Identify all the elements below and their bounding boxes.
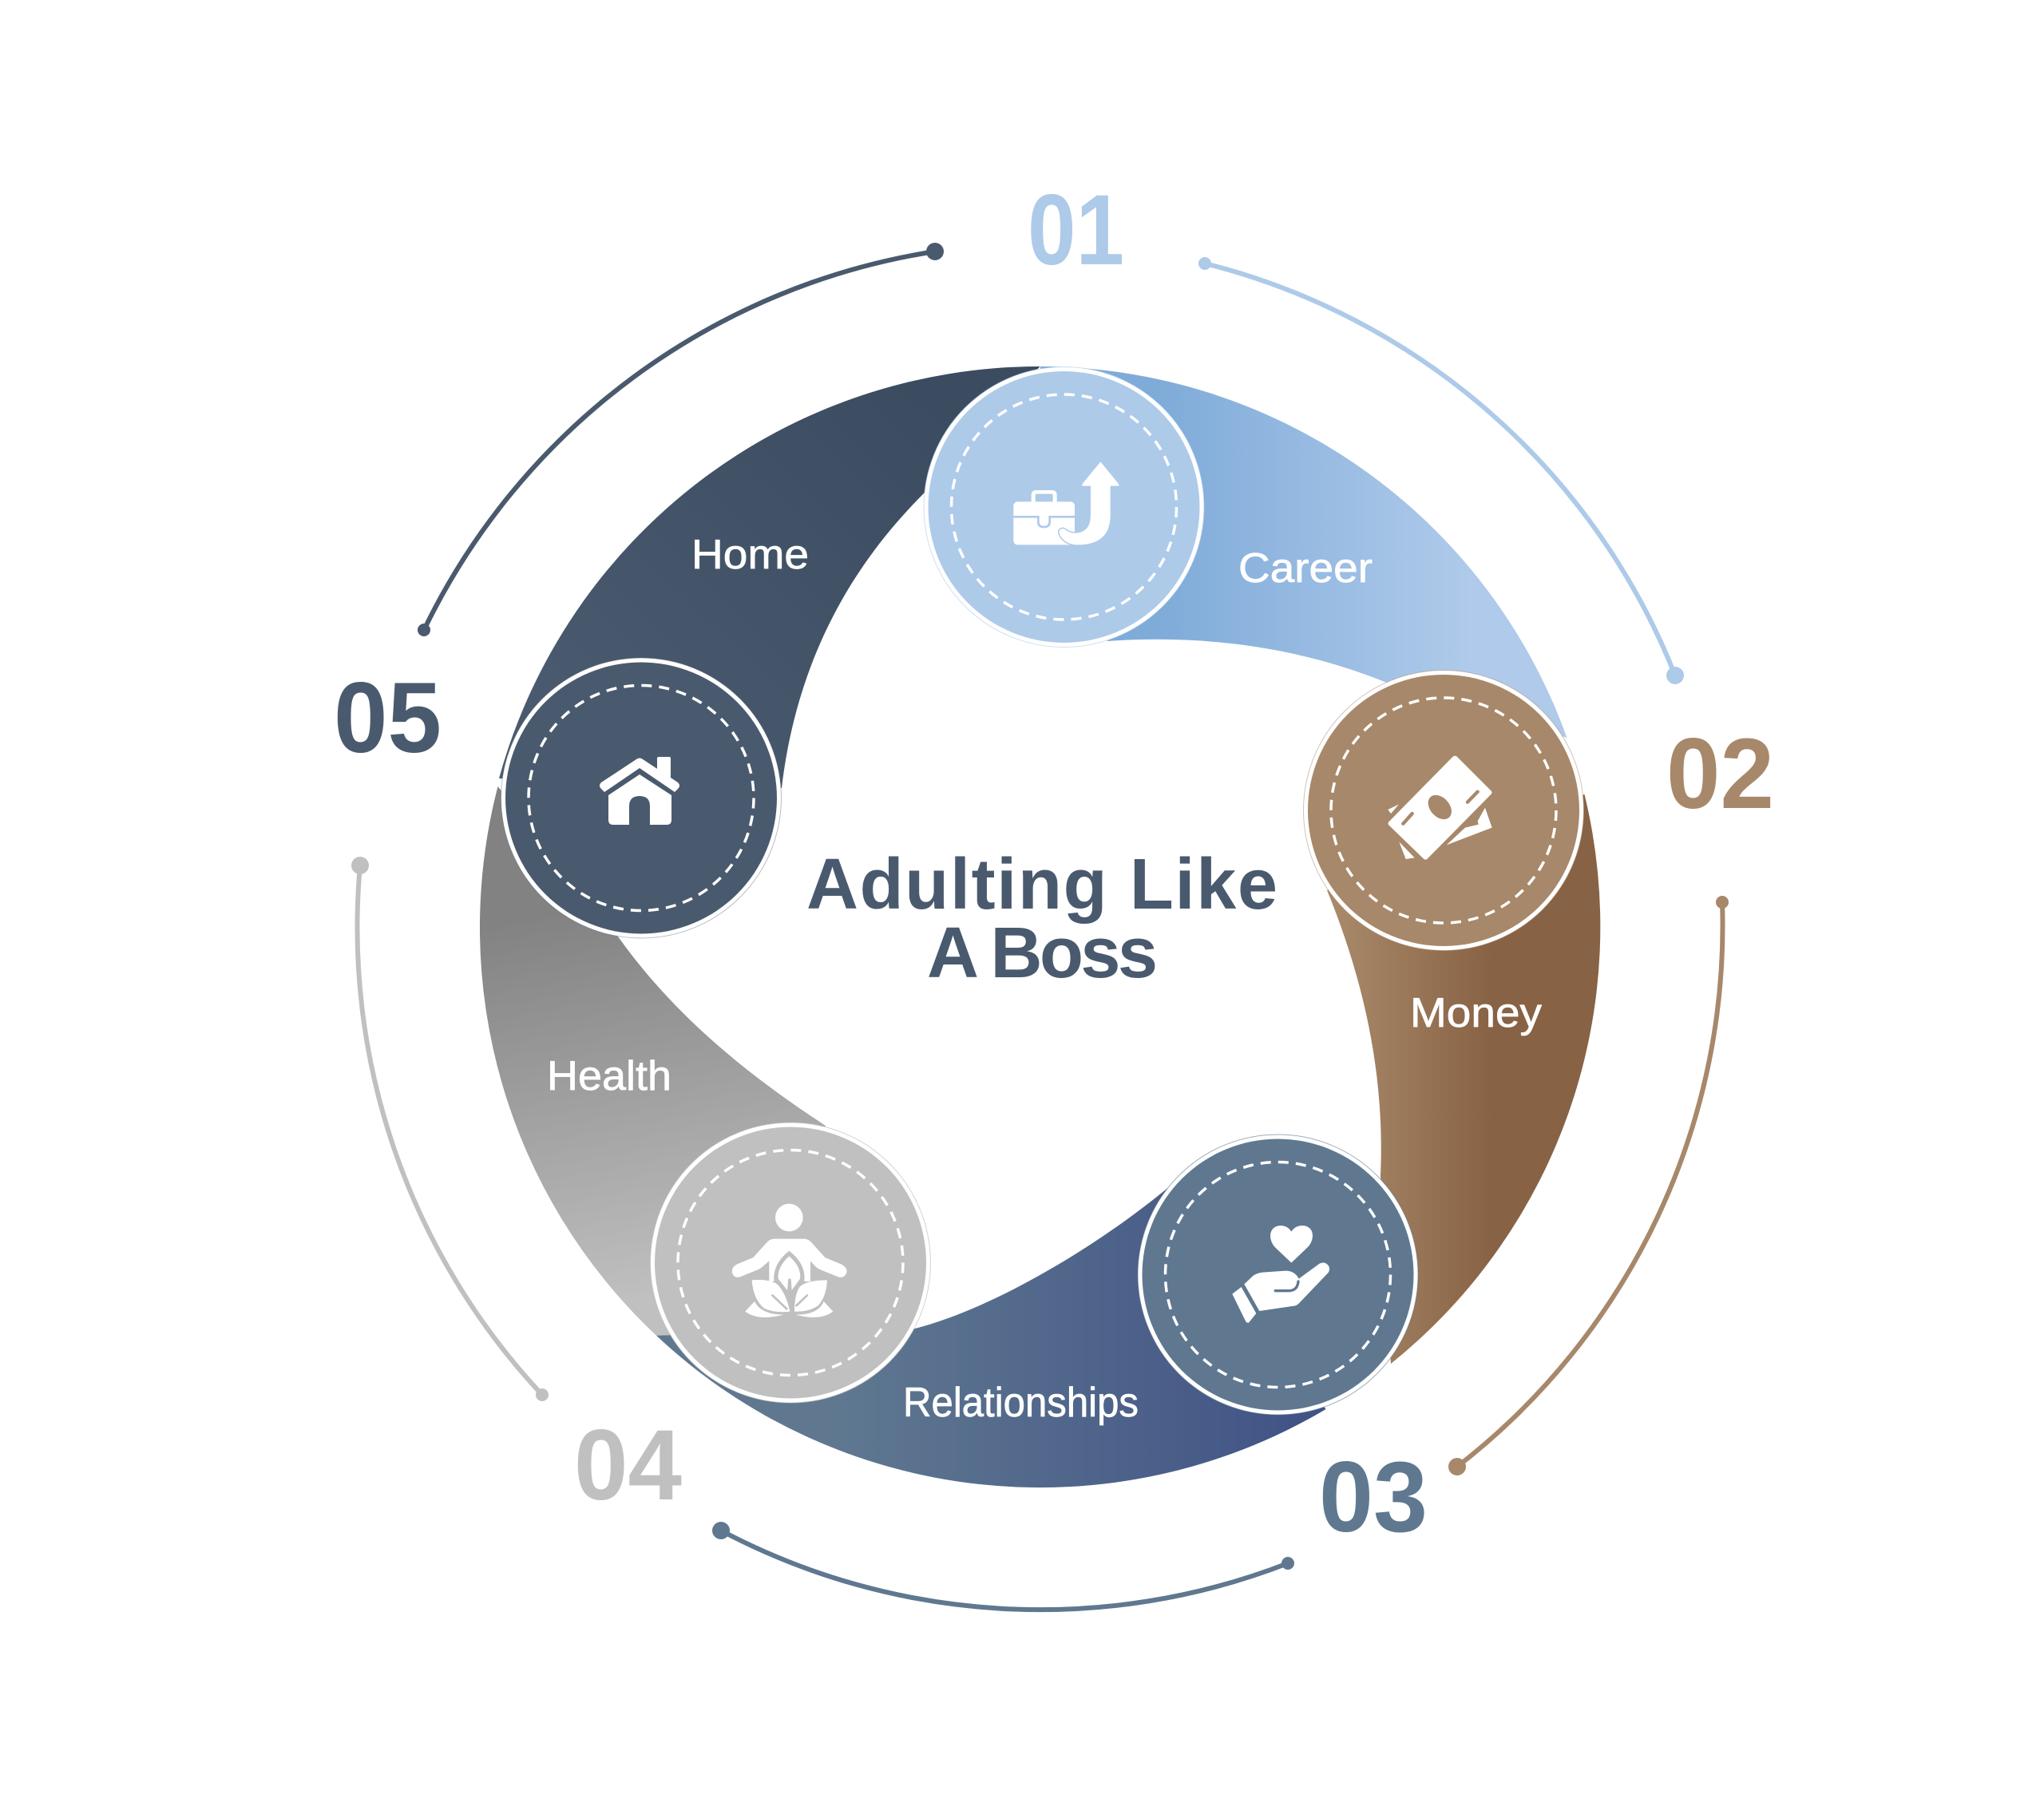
icon: house: [600, 757, 679, 825]
node: home: [501, 658, 781, 938]
label: Health: Health: [547, 1053, 671, 1099]
band: health: [480, 786, 826, 1337]
label: Career: Career: [1238, 545, 1373, 592]
icon: briefcase with rising arrow: [1013, 461, 1119, 545]
title: [806, 845, 1278, 993]
icon: banknotes: [1388, 756, 1492, 860]
title: Adulting Like: [806, 845, 1278, 925]
label: Relationships: Relationships: [903, 1380, 1139, 1426]
outer arc: step 01 career: [1198, 257, 1684, 684]
outer arc: step 05 home: [418, 243, 944, 636]
node: health: [650, 1123, 931, 1403]
band: relationships: [656, 1186, 1325, 1487]
outer arc: step 02 money: [1448, 896, 1729, 1475]
band: money: [1327, 794, 1600, 1364]
label: Money: Money: [1410, 990, 1542, 1036]
node: money: [1303, 671, 1584, 950]
icon: hand holding heart: [1232, 1226, 1329, 1323]
label: Home: Home: [691, 532, 809, 578]
number 03: 03: [1319, 1442, 1428, 1553]
title: A Boss: [927, 913, 1158, 993]
number 01: 01: [1028, 175, 1124, 286]
number 04: 04: [574, 1410, 682, 1521]
band: career: [1040, 366, 1567, 738]
number 02: 02: [1666, 719, 1774, 830]
band: home: [499, 366, 1040, 788]
node: career: [924, 367, 1204, 647]
icon: meditating figure with leaves: [732, 1204, 847, 1317]
number 05: 05: [334, 663, 442, 774]
node: relationships: [1138, 1135, 1418, 1415]
outer arc: step 04 health: [351, 857, 549, 1401]
outer arc: step 03 relationships: [712, 1522, 1294, 1610]
